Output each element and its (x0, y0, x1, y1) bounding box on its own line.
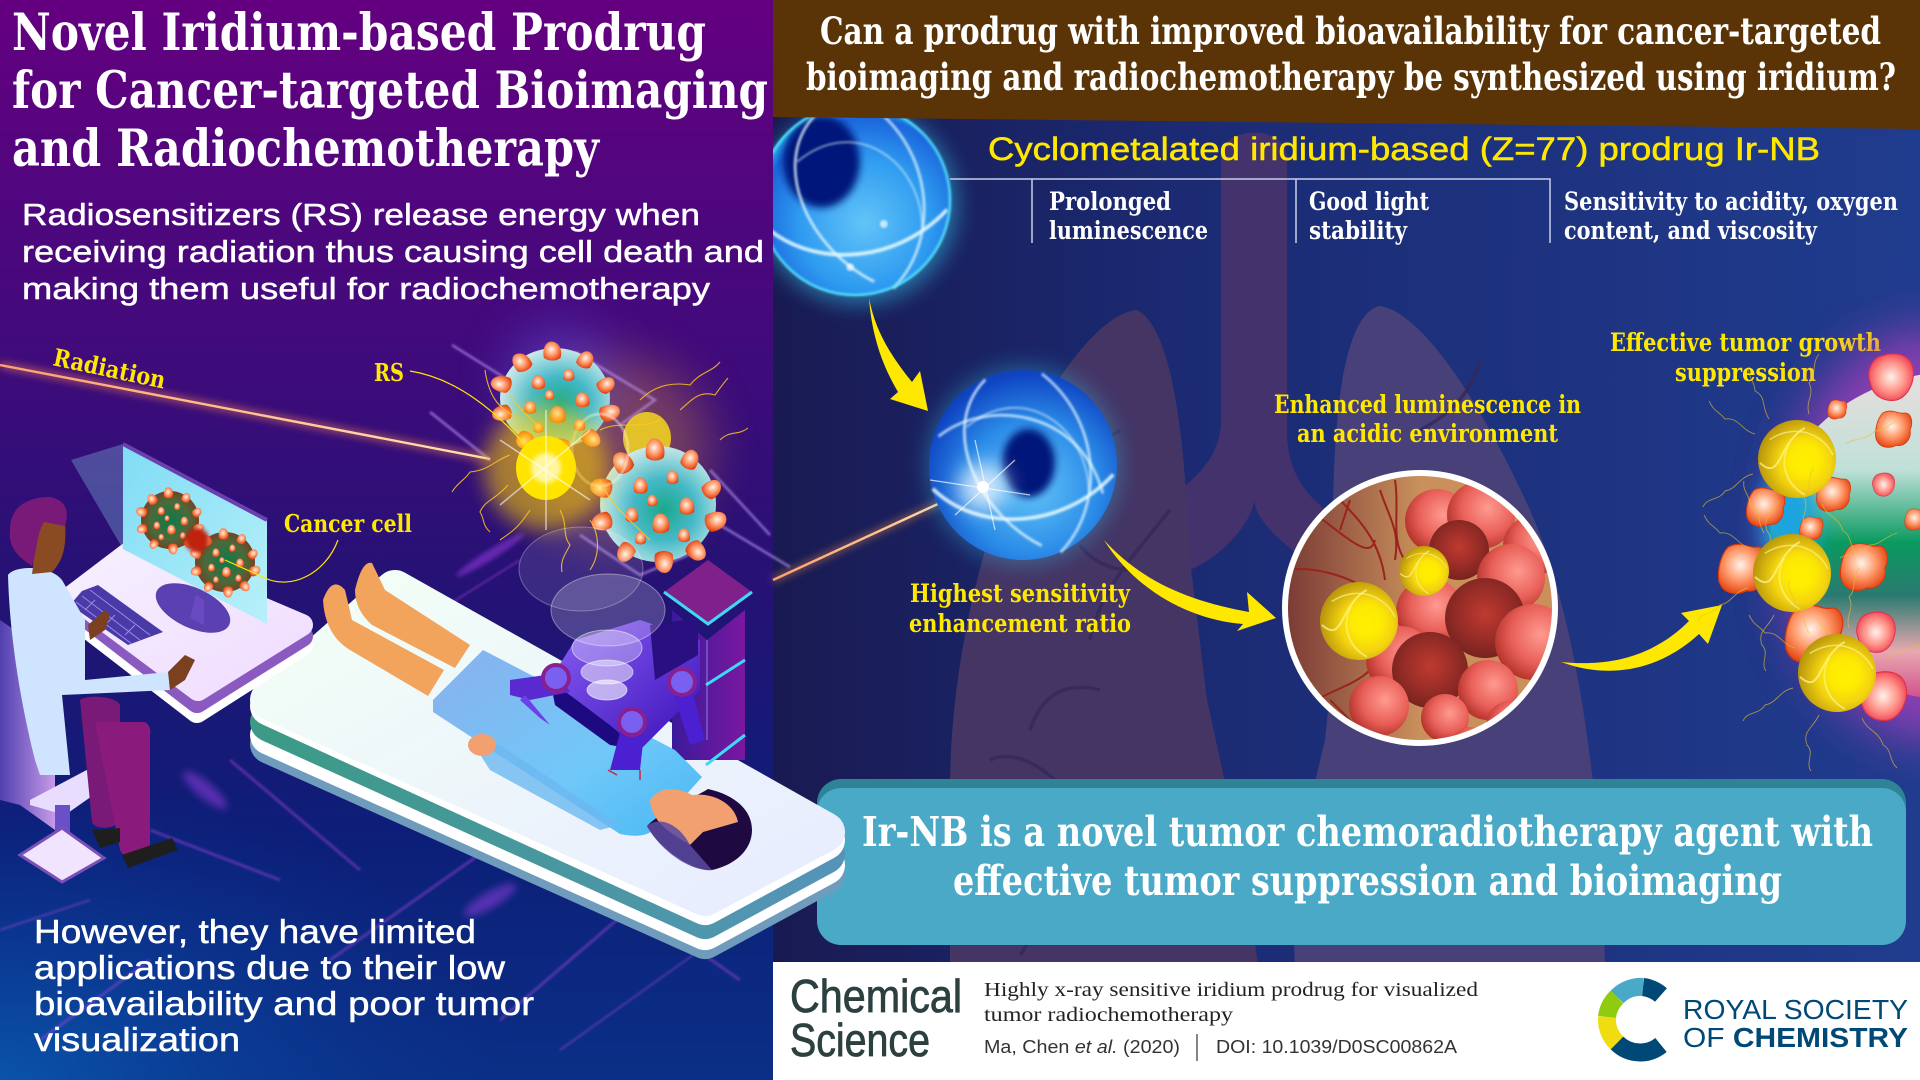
illustration: tumor close-up (1285, 473, 1571, 763)
citation: Highly x-ray sensitive iridium prodrug for visualized (984, 979, 1478, 1001)
text: limitations: applications due to their low (34, 949, 505, 986)
illustration: surgical robot (510, 618, 705, 780)
heading: prodrug name: Cyclometalated iridium-based (Z=77) prodrug Ir-NB (988, 131, 1820, 167)
text: radiosensitizer intro: Radiosensitizers (RS) release energy when (22, 197, 700, 232)
label: Cancer cell with leader (225, 509, 412, 582)
text: property sensitivity (1564, 187, 1898, 245)
text: property luminescence: Prolonged (1049, 187, 1171, 216)
text: limitations: However, they have limited (34, 913, 476, 950)
label: enhanced luminescence: Enhanced luminescence in (1274, 390, 1581, 419)
illustration: doctor at workstation (0, 444, 302, 882)
illustration: patient (323, 563, 752, 870)
text: limitations (34, 913, 534, 1058)
lungs silhouette (950, 132, 1605, 965)
text: property luminescence: luminescence (1049, 216, 1208, 245)
label: highest sensitivity (909, 579, 1131, 638)
title (12, 3, 768, 179)
illustration: radiation beam left (0, 365, 490, 459)
label: RS with leader: RS (374, 358, 404, 387)
journal logo: Chemical Science: Science (790, 1014, 930, 1066)
icon: activated orb (925, 365, 1121, 565)
label: Cancer cell with leader: Cancer cell (284, 509, 412, 538)
patient head (647, 789, 752, 870)
text: radiosensitizer intro (22, 197, 764, 306)
patient gown (433, 650, 702, 836)
arrow: orb to activation (869, 298, 928, 411)
logo: Royal Society of Chemistry: ROYAL SOCIETY (1683, 994, 1908, 1025)
text: property light stability: stability (1309, 216, 1408, 245)
panel: conclusion: effective tumor suppression and bioimaging (953, 857, 1782, 905)
citation: tumor radiochemotherapy (984, 1004, 1233, 1026)
text: property light stability (1309, 187, 1430, 245)
label: effective suppression: Effective tumor growth (1610, 328, 1881, 357)
title: and Radiochemotherapy (12, 119, 600, 179)
logo: Royal Society of Chemistry (1607, 987, 1908, 1053)
doctor coat (8, 568, 170, 775)
monitor (71, 444, 267, 625)
doctor head (10, 497, 195, 690)
patient legs (323, 563, 470, 696)
label: highest sensitivity: enhancement ratio (909, 609, 1131, 638)
illustration: radiation beam into orb (773, 485, 979, 580)
journal logo: Chemical Science (790, 970, 962, 1066)
illustration: hologram domes (519, 527, 665, 700)
heading: prodrug name (950, 131, 1820, 243)
text: property sensitivity: content, and viscosity (1564, 216, 1818, 245)
text: property sensitivity: Sensitivity to acidity, oxygen (1564, 187, 1898, 216)
illustration: bed (270, 590, 825, 939)
text: radiosensitizer intro: making them useful for radiochemotherapy (22, 271, 711, 306)
text: property light stability: Good light (1309, 187, 1430, 216)
text: limitations: bioavailability and poor tumor (34, 985, 534, 1022)
text: limitations: visualization (34, 1021, 240, 1058)
journal logo: Chemical Science: Chemical (790, 970, 962, 1022)
citation (984, 979, 1478, 1061)
label: effective suppression (1610, 328, 1881, 387)
arrow: to tumor suppression (1561, 605, 1722, 671)
label: highest sensitivity: Highest sensitivity (910, 579, 1131, 608)
label: enhanced luminescence: an acidic environment (1297, 419, 1559, 448)
panel: left background (0, 0, 773, 1080)
illustration: imaging pillar (664, 560, 752, 765)
panel: question banner (773, 0, 1920, 129)
text: property luminescence (1049, 187, 1208, 245)
panel: right background with lungs (773, 100, 1920, 970)
label: RS with leader (374, 358, 525, 445)
icon: prodrug orb top (758, 104, 958, 305)
footer background (773, 962, 1920, 1080)
chair (0, 620, 115, 882)
illustration: radiosensitizer hitting cancer cells (430, 325, 790, 575)
title: Novel Iridium-based Prodrug (12, 3, 706, 63)
label: effective suppression: suppression (1675, 358, 1816, 387)
label: enhanced luminescence (1274, 390, 1581, 448)
workstation desk (70, 552, 302, 712)
illustration: tumor being destroyed (1698, 330, 1920, 771)
citation: Ma, Chen et al. (2020) (984, 1037, 1180, 1057)
arrow: to tumor (1104, 540, 1276, 631)
text: radiosensitizer intro: receiving radiation thus causing cell death and (22, 234, 764, 269)
citation: DOI: 10.1039/D0SC00862A (1216, 1037, 1457, 1057)
doctor legs (80, 697, 178, 868)
title: for Cancer-targeted Bioimaging (12, 61, 768, 121)
label: Radiation: Radiation (51, 343, 169, 395)
logo: Royal Society of Chemistry: OF CHEMISTRY (1683, 1022, 1908, 1053)
panel: conclusion (817, 779, 1906, 945)
